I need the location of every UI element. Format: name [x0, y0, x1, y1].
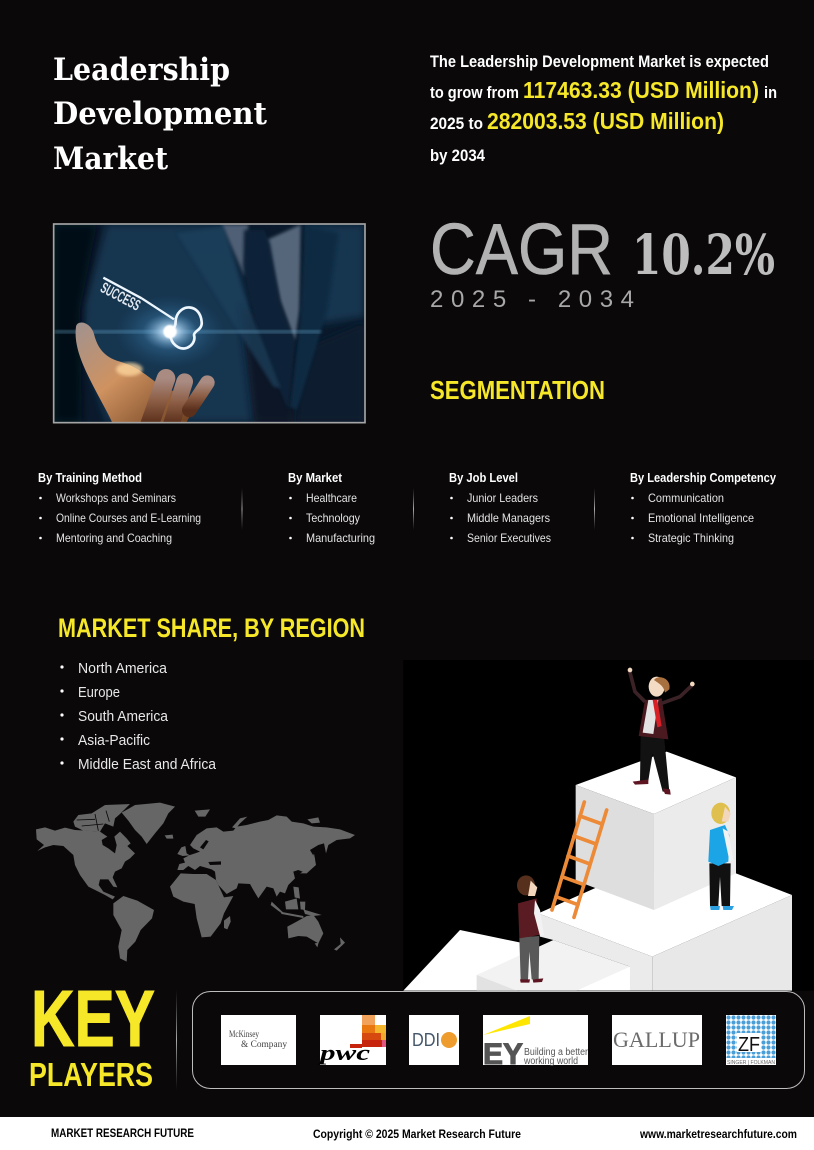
key players panel [192, 992, 804, 1088]
logo: ZF [726, 1015, 776, 1066]
segment: by market: By Market [288, 470, 343, 485]
segment: by market [288, 470, 375, 545]
footer: MARKET RESEARCH FUTURE [51, 1126, 194, 1140]
logo: DDI: DDI [412, 1030, 440, 1050]
photo: hand with success key: SUCCESS [97, 280, 143, 315]
logo: EY: working world [523, 1056, 578, 1067]
logo: Gallup [612, 1015, 702, 1065]
logo: EY: Building a better [524, 1047, 589, 1058]
CAGR [430, 210, 775, 313]
CAGR: 10.2% [632, 222, 775, 287]
lower step [403, 930, 630, 991]
region list: North America [78, 660, 168, 677]
top cube [576, 752, 736, 814]
region list: South America [78, 708, 169, 725]
key players heading: PLAYERS [29, 1056, 153, 1093]
segment: by training method: Mentoring and Coaching [56, 531, 172, 545]
region list: Europe [78, 684, 120, 701]
shirt [222, 225, 248, 277]
middle step [538, 873, 792, 957]
logo: PwC: pwc [317, 1040, 370, 1065]
illustration: leaders on podium steps [403, 660, 814, 991]
segmentation heading: SEGMENTATION [430, 375, 605, 405]
market forecast text: to grow from [430, 83, 519, 102]
title: Development [53, 96, 268, 132]
jacket lapels [177, 227, 281, 388]
CAGR: 2025 - 2034 [430, 286, 634, 313]
world map [36, 803, 355, 962]
logo: McKinsey: & Company [241, 1039, 288, 1049]
market forecast text: in [764, 83, 777, 102]
necktie [243, 230, 295, 410]
segment: by leadership competency: Communication [648, 491, 724, 505]
person on the right [708, 803, 734, 910]
key players heading [29, 974, 155, 1093]
key [103, 278, 202, 349]
market share heading: MARKET SHARE, BY REGION [58, 613, 365, 643]
region list [60, 660, 217, 773]
segment: by leadership competency: Strategic Thinking [648, 531, 734, 545]
segment: by job level: Senior Executives [467, 531, 551, 545]
footer: Copyright © 2025 Market Research Future [313, 1127, 521, 1141]
segment: by job level: By Job Level [449, 470, 518, 485]
segment: by training method: Workshops and Seminars [56, 491, 176, 505]
segment: by market: Healthcare [306, 491, 357, 505]
title: Leadership [53, 52, 230, 88]
segment: by training method: By Training Method [38, 470, 142, 485]
hand [76, 323, 197, 422]
segment: by leadership competency: Emotional Intelligence [648, 511, 754, 525]
segment: by market: Technology [306, 511, 360, 525]
market forecast text: The Leadership Development Market is expected [430, 52, 769, 71]
logo: EY [483, 1015, 589, 1071]
region list: Middle East and Africa [78, 756, 217, 773]
market forecast text: by 2034 [430, 146, 485, 165]
photo: hand with success key [54, 224, 365, 423]
logo: McKinsey [221, 1015, 296, 1065]
person on top [628, 668, 695, 795]
CAGR: CAGR [430, 210, 613, 290]
segment: by market: Manufacturing [306, 531, 375, 545]
region list: Asia-Pacific [78, 732, 150, 749]
market forecast text: 2025 to [430, 114, 483, 133]
logo: McKinsey: McKinsey [229, 1029, 259, 1039]
segment: by job level [449, 470, 551, 545]
title: Market [53, 141, 169, 177]
segment: by job level: Middle Managers [467, 511, 550, 525]
logo: ZF: ZF [738, 1034, 760, 1056]
logo: PwC [317, 1015, 386, 1065]
segment: by training method [38, 470, 201, 545]
segment: by training method: Online Courses and E-Learning [56, 511, 201, 525]
market forecast text: 282003.53 (USD Million) [487, 108, 724, 134]
segment: by leadership competency [630, 470, 777, 545]
key players heading: KEY [31, 974, 155, 1063]
segment: by leadership competency: By Leadership Competency [630, 470, 777, 485]
title [53, 52, 268, 177]
logo: EY: EY [483, 1038, 523, 1071]
logo: Gallup: GALLUP [613, 1027, 700, 1052]
logo: ZF: SINGER | FOLKMAN [727, 1060, 775, 1066]
market forecast text [430, 52, 777, 165]
logo: DDI [409, 1015, 459, 1065]
footer [0, 1117, 814, 1150]
ladder [552, 802, 607, 917]
market forecast text: 117463.33 (USD Million) [523, 77, 759, 103]
segment: by job level: Junior Leaders [467, 491, 538, 505]
person bottom left [517, 875, 544, 983]
